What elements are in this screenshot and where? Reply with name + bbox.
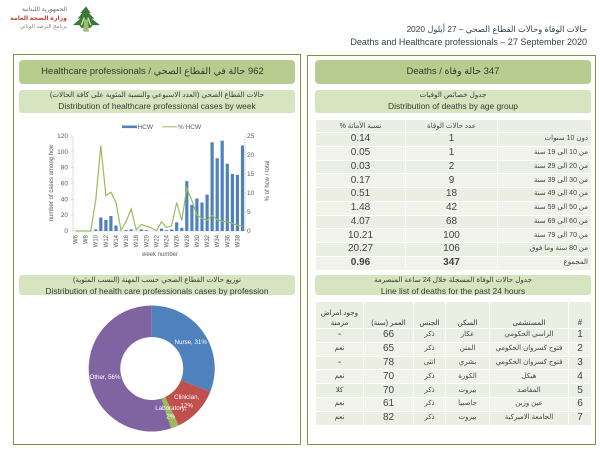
table: deaths by age group: المجموع: [564, 259, 588, 266]
left axis values: 120: [57, 133, 68, 140]
heading: deaths: 347 حالة وفاة / Deaths: [407, 66, 499, 77]
table: line list of deaths: 70: [383, 385, 394, 396]
table: line list of deaths: ذكر: [424, 387, 435, 394]
table: line list of deaths: فتوح كسروان الحكومي: [495, 345, 563, 352]
table: deaths by age group: من 50 الى 59 سنة: [534, 204, 588, 211]
right axis values: 25: [247, 133, 255, 140]
table: deaths by age group: 1.48: [351, 202, 370, 213]
table: deaths by age group: 42: [446, 202, 457, 213]
table: line list of deaths: 7: [577, 412, 583, 423]
table: line list of deaths: نعم: [334, 373, 344, 380]
table: line list of deaths: 2: [577, 343, 583, 354]
week labels: W20: [144, 234, 150, 247]
table: deaths by age group: 0.03: [351, 161, 370, 172]
table: deaths by age group: 2: [449, 161, 454, 172]
legend: [122, 124, 202, 131]
donut labels: Laboratory,: [155, 405, 186, 412]
table: line list of deaths: فتوح كسروان الحكومي: [495, 359, 563, 366]
axis titles: number of cases among hcw: [49, 144, 55, 221]
table: line list of deaths: -: [338, 357, 341, 368]
axes: [71, 136, 247, 231]
right axis values: 5: [247, 209, 251, 216]
table: line list of deaths: انثى: [424, 359, 435, 366]
table: line list of deaths: نعم: [334, 400, 344, 407]
donut labels: 12%: [181, 402, 193, 410]
table: line list of deaths: ذكر: [424, 331, 435, 338]
table: deaths by age group: 0.05: [351, 147, 370, 158]
table: line list of deaths: الكورة: [458, 373, 477, 380]
week labels: W32: [205, 234, 211, 247]
table: line list of deaths: 70: [383, 371, 394, 382]
title: [350, 24, 587, 47]
table: line list of deaths: المتن: [460, 345, 475, 352]
table: line list of deaths: 4: [577, 371, 583, 382]
week labels: W26: [175, 234, 181, 247]
week labels: W18: [134, 234, 140, 247]
week labels: W22: [154, 234, 160, 247]
left axis values: 100: [57, 149, 68, 156]
table: line list of deaths: نعم: [334, 345, 344, 352]
table: line list of deaths: بيروت: [459, 387, 476, 394]
heading: deaths: [315, 60, 591, 84]
table: line list of deaths: السكن: [457, 318, 478, 327]
subheading: line list of deaths: جدول حالات الوفاة المسجلة خلال 24 ساعة المنصرمة: [374, 275, 532, 284]
table: deaths by age group: 100: [443, 230, 460, 241]
table: line list of deaths: ذكر: [424, 414, 435, 421]
table: line list of deaths: [316, 302, 591, 425]
table: deaths by age group: 1: [449, 133, 454, 144]
right axis values: [247, 133, 255, 235]
table: deaths by age group: من 60 الى 69 سنة: [534, 218, 588, 225]
table: line list of deaths: 5: [577, 385, 583, 396]
week labels: W34: [215, 234, 221, 247]
week labels: W10: [94, 234, 100, 247]
table: line list of deaths: كلا: [336, 387, 343, 394]
donut chart: cases by profession: [88, 306, 215, 432]
table: line list of deaths: 65: [383, 343, 394, 354]
table: line list of deaths: بشري: [459, 359, 476, 366]
donut labels: Clinician,: [174, 394, 200, 401]
table: line list of deaths: عكار: [461, 331, 474, 338]
right axis values: 10: [247, 190, 255, 197]
table: deaths by age group: 10.21: [348, 230, 373, 241]
% HCW line: [76, 146, 242, 231]
table: line list of deaths: نعم: [334, 414, 344, 421]
right axis values: 15: [247, 171, 255, 178]
table: deaths by age group: من 70 الى 79 سنة: [534, 232, 588, 239]
week labels: W36: [225, 234, 231, 247]
table: deaths by age group: 18: [446, 188, 457, 199]
table: line list of deaths: 3: [577, 357, 583, 368]
table: deaths by age group: من 20 الى 29 سنة: [534, 163, 588, 170]
subheading: cases by week: Distribution of healthcare professional cases by week: [58, 101, 256, 111]
table: deaths by age group: 0.17: [351, 175, 370, 186]
table: deaths by age group: من 40 الى 49 سنة: [534, 190, 588, 197]
table: deaths by age group: من 80 سنة وما فوق: [530, 245, 588, 252]
table: deaths by age group: 1: [449, 147, 454, 158]
table: deaths by age group: دون 10 سنوات: [545, 135, 588, 142]
subheading: cases by profession: [19, 275, 295, 295]
heading: healthcare professionals: [19, 60, 295, 84]
table: deaths by age group: 0.51: [351, 188, 370, 199]
icon: cedar tree: [73, 6, 100, 32]
week labels: W24: [165, 234, 171, 247]
table: deaths by age group: [316, 120, 591, 270]
table: line list of deaths: ذكر: [424, 373, 435, 380]
subheading: deaths by age group: جدول خصائص الوفيات: [419, 90, 487, 99]
left axis values: 20: [61, 212, 68, 219]
subheading: cases by week: حالات القطاع الصحي (العدد الاسبوعي والنسبة المئوية على كافة الحالات): [50, 90, 264, 99]
table: deaths by age group: من 10 الى 19 سنة: [534, 149, 588, 156]
table: deaths by age group: نسبة الأماتة %: [340, 122, 381, 130]
left axis values: 0: [64, 228, 68, 235]
panel: healthcare professionals: [13, 54, 301, 445]
axis titles: % of hcw / total: [265, 161, 271, 201]
legend: HCW: [138, 124, 154, 131]
subheading: cases by week: [19, 90, 295, 113]
week labels: W16: [124, 234, 130, 247]
legend: % HCW: [178, 124, 202, 131]
table: line list of deaths: ذكر: [424, 400, 435, 407]
week labels: W30: [195, 234, 201, 247]
table: deaths by age group: 106: [443, 243, 460, 254]
ministry name in Arabic: الجمهورية اللبنانية: [22, 6, 67, 13]
table: deaths by age group: 9: [449, 175, 454, 186]
table: line list of deaths: 82: [383, 412, 394, 423]
week labels: W6: [74, 234, 80, 244]
table: line list of deaths: 78: [383, 357, 394, 368]
table: line list of deaths: 1: [577, 329, 583, 340]
subheading: deaths by age group: Distribution of deaths by age group: [388, 101, 518, 111]
table: line list of deaths: ذكر: [424, 345, 435, 352]
week labels: W8: [84, 234, 90, 244]
axis titles: week number: [141, 252, 178, 258]
left axis values: [57, 133, 68, 235]
donut labels: 2%: [166, 414, 176, 420]
slice: clinician: [165, 380, 210, 426]
table: line list of deaths: المقاصد: [517, 387, 541, 394]
heading: healthcare professionals: 962 حالة في القطاع الصحي / Healthcare professionals: [41, 66, 264, 77]
table: deaths by age group: عدد حالات الوفاة: [427, 122, 476, 130]
left axis values: 40: [61, 196, 68, 203]
table: deaths by age group: 347: [443, 257, 460, 268]
title: حالات الوفاة وحالات القطاع الصحي – 27 أيلول 2020: [407, 24, 587, 34]
table: deaths by age group: من 30 الى 39 سنة: [534, 177, 588, 184]
slice: other: [89, 306, 171, 432]
subheading: cases by profession: توزيع حالات القطاع الصحي حسب المهنة (النسب المئوية): [73, 275, 241, 284]
table: line list of deaths: 66: [383, 329, 394, 340]
ministry name in Arabic: برنامج الترصد الوبائي: [20, 24, 67, 30]
table: line list of deaths: #: [578, 318, 582, 327]
donut labels: [90, 339, 207, 420]
table: line list of deaths: وجود امراض مزمنة: [321, 308, 358, 327]
subheading: line list of deaths: Line list of deaths for the past 24 hours: [381, 286, 525, 296]
table: deaths by age group: 0.14: [351, 133, 370, 144]
logo: Ministry of Public Health: [10, 6, 100, 32]
title: Deaths and Healthcare professionals – 27 September 2020: [350, 37, 587, 47]
week labels: [74, 234, 241, 247]
table: deaths by age group: 20.27: [348, 243, 373, 254]
subheading: deaths by age group: [315, 90, 591, 113]
table: line list of deaths: العمر (سنة): [371, 318, 406, 327]
table: line list of deaths: هيكل: [522, 373, 536, 380]
week labels: W14: [114, 234, 120, 247]
week labels: W12: [104, 234, 110, 247]
axis titles: [49, 144, 271, 258]
right axis values: 0: [247, 228, 251, 235]
table: line list of deaths: -: [338, 329, 341, 340]
table: deaths by age group: 68: [446, 216, 457, 227]
week labels: W28: [185, 234, 191, 247]
week labels: W38: [235, 234, 241, 247]
panel: deaths: [307, 55, 596, 445]
subheading: line list of deaths: [315, 275, 591, 295]
bar and line chart: cases by week: [48, 124, 271, 258]
table: line list of deaths: الراسي الحكومي: [504, 331, 554, 338]
table: line list of deaths: 6: [577, 398, 583, 409]
subheading: cases by profession: Distribution of health care professionals cases by profession: [46, 286, 268, 296]
table: line list of deaths: حاصبيا: [458, 400, 477, 407]
table: line list of deaths: عين وزين: [515, 400, 543, 407]
slice: laboratory: [161, 397, 178, 428]
slice: nurse: [152, 306, 215, 392]
donut labels: Other, 56%: [90, 374, 121, 381]
left axis values: 80: [61, 165, 68, 172]
table: line list of deaths: 61: [383, 398, 394, 409]
table: line list of deaths: الجامعة الاميركية: [505, 414, 553, 421]
donut labels: Nurse, 31%: [175, 339, 207, 346]
right axis values: 20: [247, 152, 255, 159]
table: deaths by age group: 0.96: [351, 257, 370, 268]
table: line list of deaths: المستشفى: [513, 318, 545, 327]
table: deaths by age group: 4.07: [351, 216, 370, 227]
ministry name in Arabic: وزارة الصحة العامة: [10, 14, 67, 22]
HCW bars: [94, 141, 244, 231]
table: line list of deaths: بيروت: [459, 414, 476, 421]
left axis values: 60: [61, 180, 68, 188]
table: line list of deaths: الجنس: [419, 318, 440, 327]
ministry name in Arabic: [10, 6, 67, 30]
